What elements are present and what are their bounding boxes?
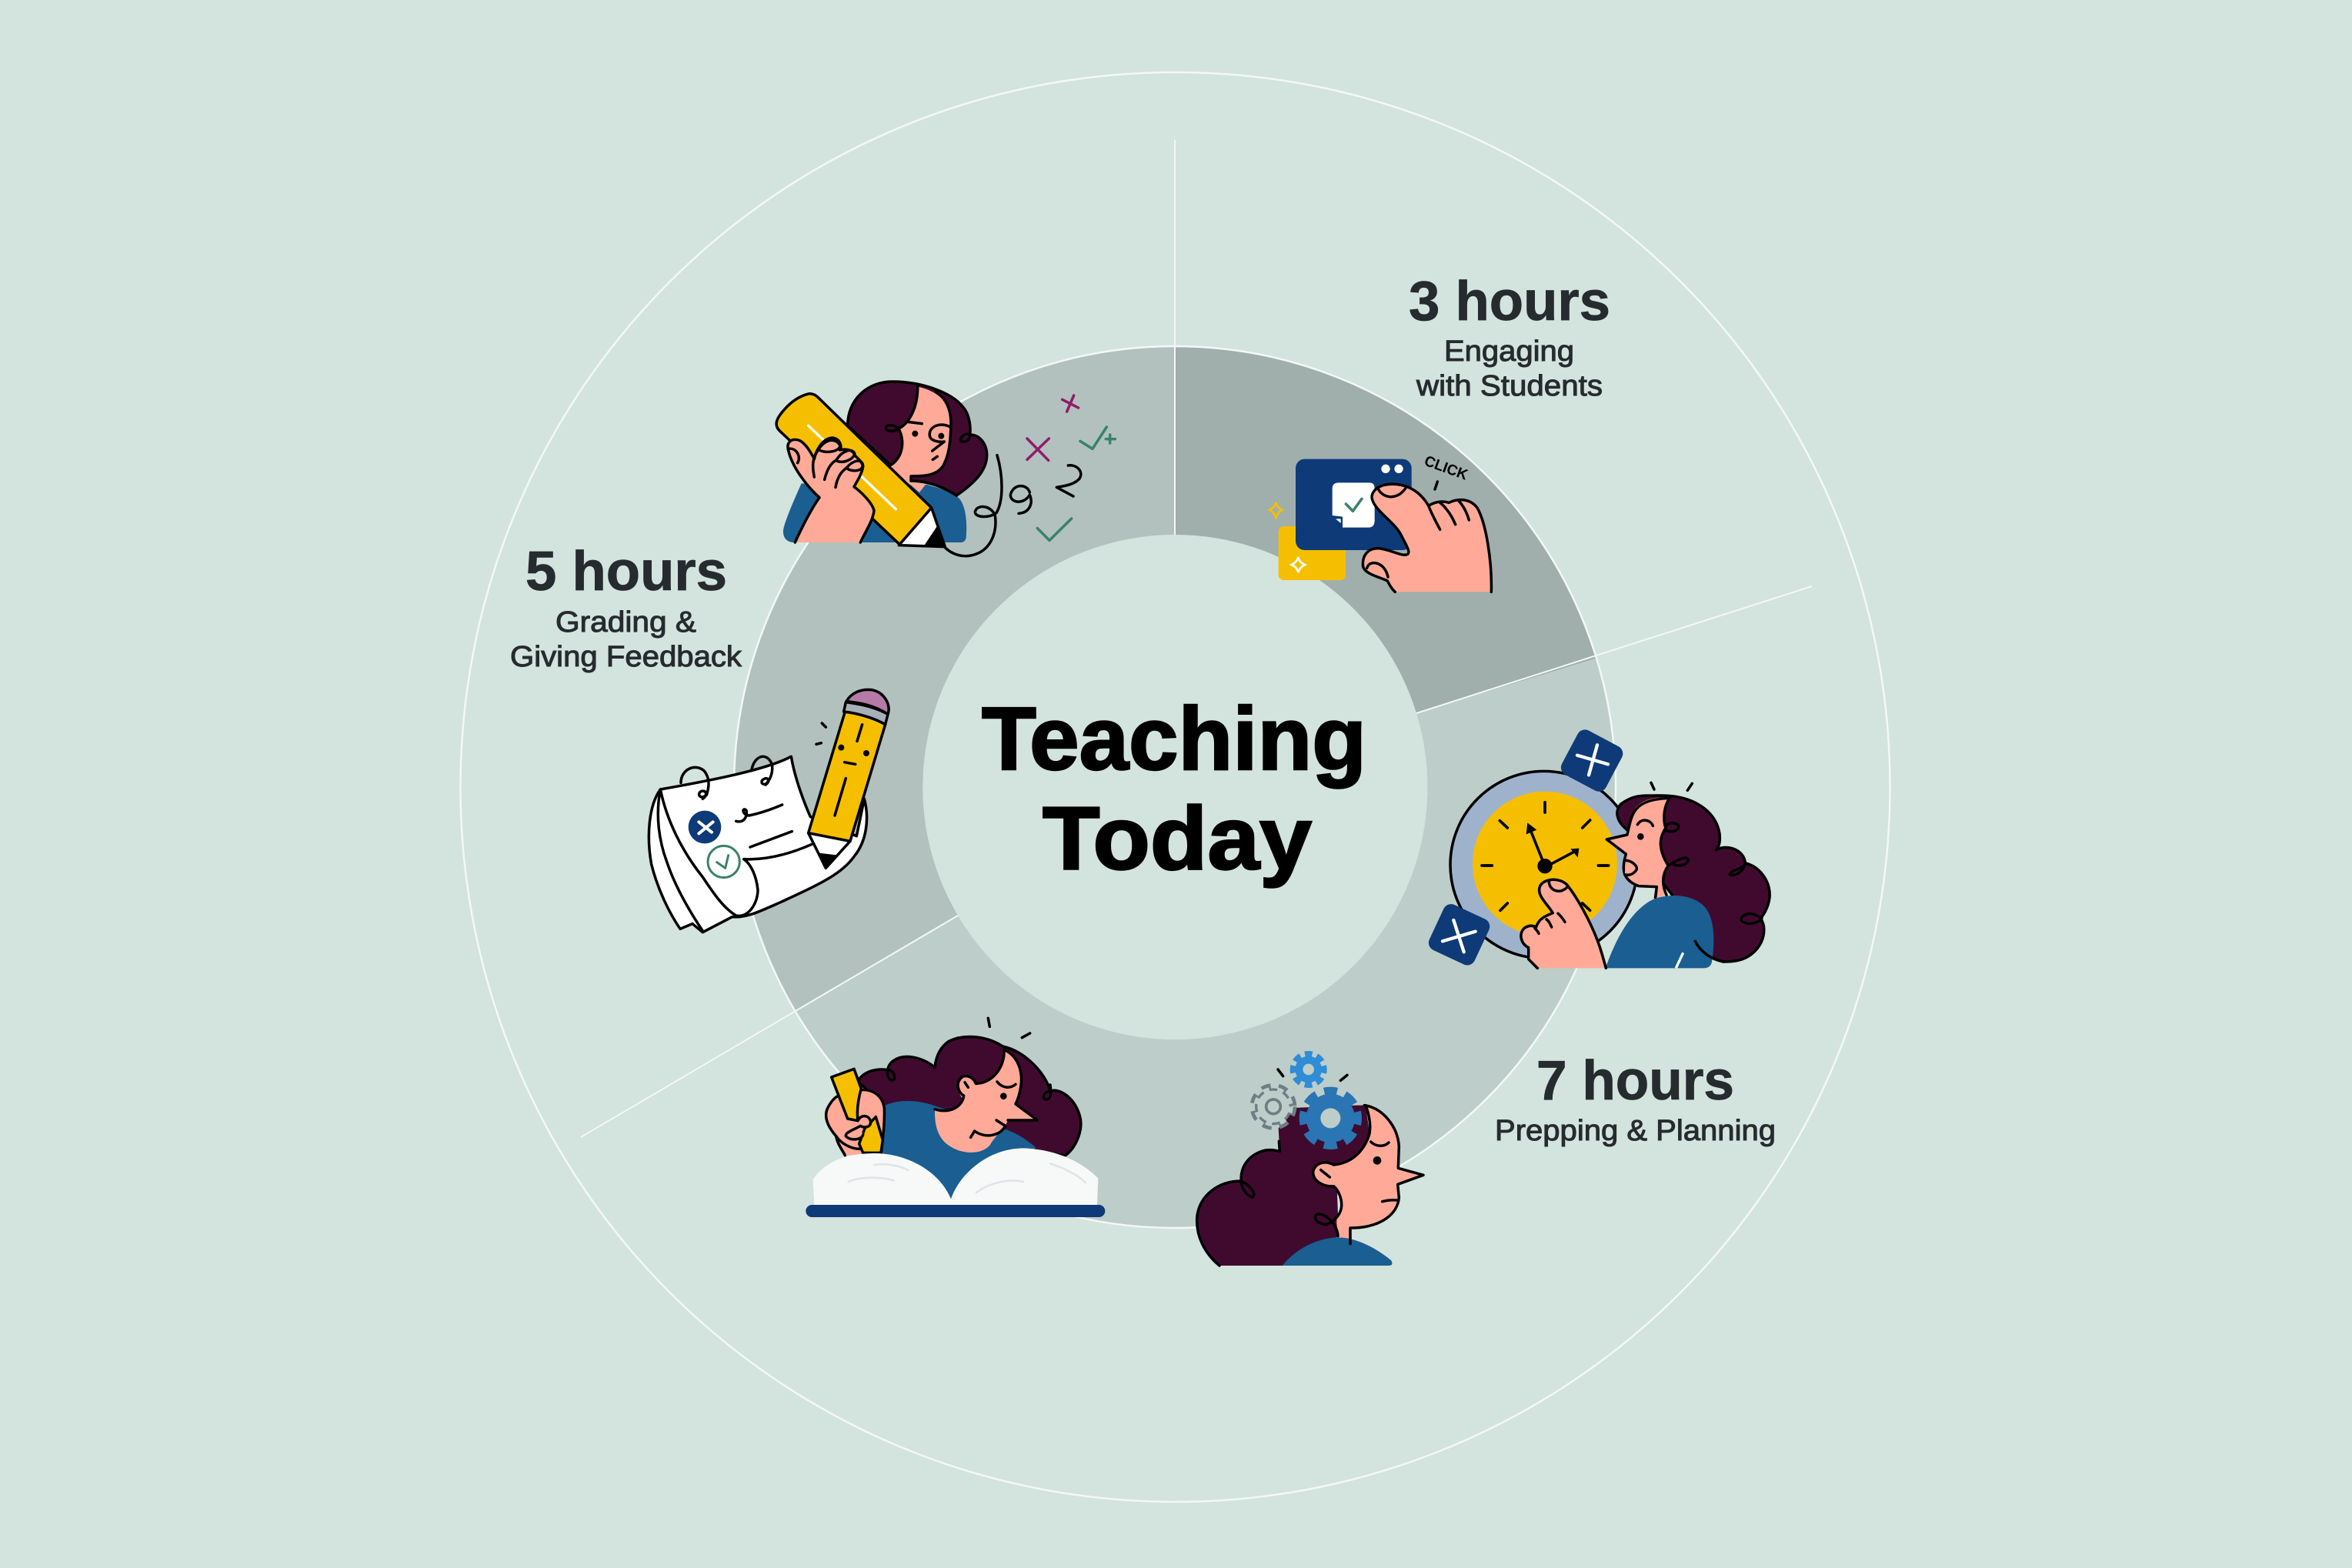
title: Teaching — [982, 689, 1366, 789]
click text: CLICK — [1422, 453, 1470, 484]
label: 5 hours: Grading & — [555, 606, 696, 639]
label: 7 hours: 7 hours — [1536, 1050, 1734, 1112]
label: 5 hours: 5 hours — [525, 541, 727, 602]
label: 3 hours — [1409, 271, 1610, 402]
ruler — [776, 394, 945, 547]
illustration: teacher looking at clock — [1426, 727, 1770, 968]
title: Today — [1043, 788, 1312, 888]
label: 3 hours: with Students — [1416, 370, 1603, 402]
illustration: notepad and pencil — [649, 689, 889, 932]
open book — [806, 1148, 1105, 1217]
woman — [1606, 782, 1770, 968]
label: 7 hours: Prepping & Planning — [1495, 1115, 1776, 1147]
gear: blue large — [1305, 1093, 1356, 1144]
illustration: teacher writing in book — [806, 1018, 1105, 1217]
hand — [788, 438, 874, 542]
pencil — [809, 689, 889, 868]
x cards — [1558, 727, 1626, 795]
illustration: teacher with gears — [1197, 1055, 1423, 1266]
label: 3 hours: 3 hours — [1409, 271, 1610, 332]
segment: 5 hours — [734, 346, 1175, 1013]
illustration: hand clicking on a screen — [1269, 453, 1491, 592]
label: 7 hours — [1495, 1050, 1776, 1147]
writing hand and pencil — [826, 1069, 884, 1156]
squiggle and numbers — [945, 455, 1081, 556]
pointing hand — [1521, 879, 1606, 968]
segment: 7 hours — [796, 659, 1616, 1229]
donut chart — [581, 140, 1812, 1229]
hand — [1363, 484, 1491, 592]
label: 5 hours — [510, 541, 742, 673]
gear: blue small — [1293, 1055, 1323, 1084]
gear: grey outline — [1255, 1088, 1292, 1125]
label: 5 hours: Giving Feedback — [510, 641, 742, 673]
illustration: teacher with ruler and numbers — [776, 382, 1115, 556]
label: 3 hours: Engaging — [1444, 335, 1574, 368]
segment: 3 hours — [1175, 346, 1596, 713]
notepad — [649, 756, 867, 932]
title — [982, 689, 1366, 888]
